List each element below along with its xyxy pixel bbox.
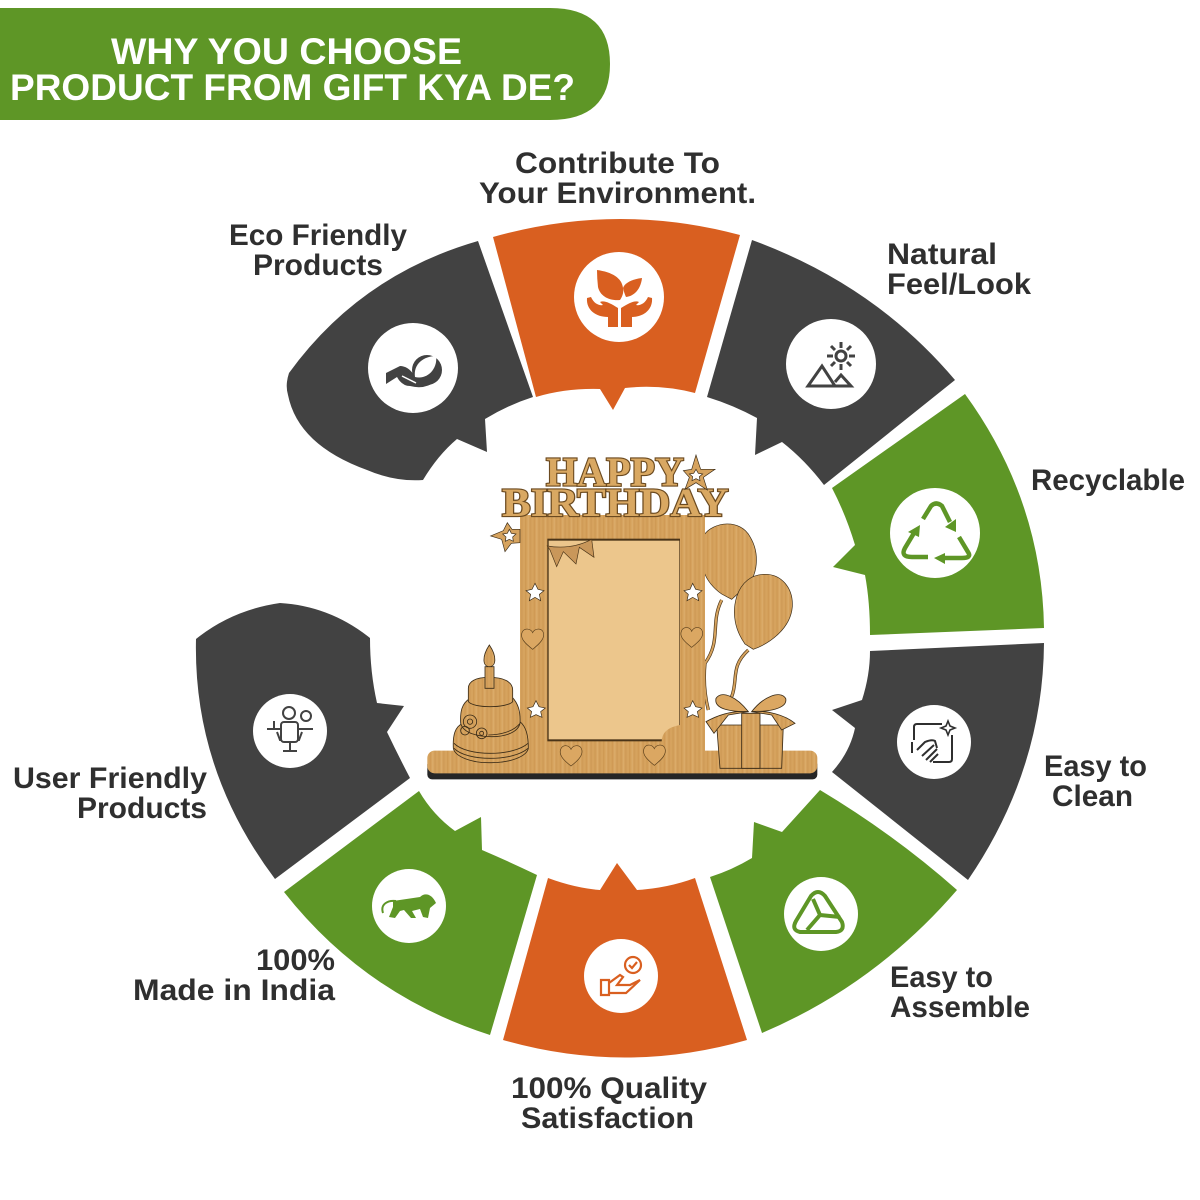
balloons and strings — [704, 524, 792, 710]
label: easy to clean: Easy to — [1044, 750, 1147, 783]
label: user friendly products: User Friendly — [13, 762, 207, 795]
icon: lion — [382, 894, 436, 918]
label: easy to clean: Clean — [1052, 780, 1133, 813]
label: eco friendly products: Eco Friendly — [229, 219, 407, 252]
icon: sun and mountains — [808, 342, 855, 386]
label: eco friendly products — [229, 219, 407, 282]
segment: eco friendly products — [287, 241, 533, 480]
icon: plant in hands — [587, 270, 652, 327]
gift box — [706, 695, 795, 768]
star decorations — [491, 455, 715, 717]
segment: recyclable — [832, 394, 1044, 635]
label: user friendly products — [13, 762, 207, 825]
base plate — [427, 751, 817, 779]
product: wooden birthday photo frame — [427, 449, 817, 779]
label: recyclable: Recyclable — [1031, 464, 1185, 497]
label: contribute to your environment: Your Environment. — [479, 177, 756, 210]
label: easy to assemble: Assemble — [890, 991, 1030, 1024]
label: 100% made in india — [133, 944, 335, 1007]
segment: natural feel/look — [707, 240, 955, 485]
icon: recycle arrows — [904, 504, 969, 564]
frame lettering — [502, 449, 729, 525]
label: 100% made in india: Made in India — [133, 974, 335, 1007]
segment: easy to clean — [832, 643, 1044, 880]
label: natural feel/look: Natural — [887, 238, 997, 271]
label: 100% quality satisfaction: 100% Quality — [511, 1072, 707, 1105]
birthday cake — [453, 645, 528, 763]
segment: easy to assemble — [710, 790, 957, 1033]
segment: user friendly products — [196, 603, 410, 879]
label: eco friendly products: Products — [253, 249, 383, 282]
label: easy to assemble — [890, 961, 1030, 1024]
label: user friendly products: Products — [77, 792, 207, 825]
icon: hand holding leaf — [386, 355, 442, 387]
header title: WHY YOU CHOOSE — [111, 31, 462, 72]
label: easy to clean — [1044, 750, 1147, 813]
label: contribute to your environment: Contribute To — [515, 147, 720, 180]
label: contribute to your environment — [479, 147, 756, 210]
label: easy to assemble: Easy to — [890, 961, 993, 994]
label: 100% made in india: 100% — [256, 944, 335, 977]
frame lettering: BIRTHDAY — [502, 480, 729, 525]
segment: contribute to your environment — [493, 219, 740, 410]
label: natural feel/look: Feel/Look — [887, 268, 1031, 301]
label: natural feel/look — [887, 238, 1031, 301]
header banner — [0, 8, 610, 120]
photo window — [547, 539, 680, 742]
icon: cleaning hand — [912, 721, 955, 762]
bunting — [547, 539, 594, 567]
icon: user at desk — [267, 707, 313, 751]
header title — [10, 31, 575, 108]
icon: assembled triangle — [794, 892, 843, 932]
frame lettering: HAPPY — [546, 449, 684, 495]
hearts — [522, 628, 703, 766]
label: 100% quality satisfaction — [511, 1072, 707, 1135]
segment: 100% quality satisfaction — [503, 863, 747, 1058]
icon: hand with quality badge — [601, 957, 641, 995]
frame body — [520, 515, 705, 765]
header title: PRODUCT FROM GIFT KYA DE? — [10, 67, 575, 108]
label: 100% quality satisfaction: Satisfaction — [521, 1102, 694, 1135]
segment: 100% made in india — [284, 791, 537, 1035]
